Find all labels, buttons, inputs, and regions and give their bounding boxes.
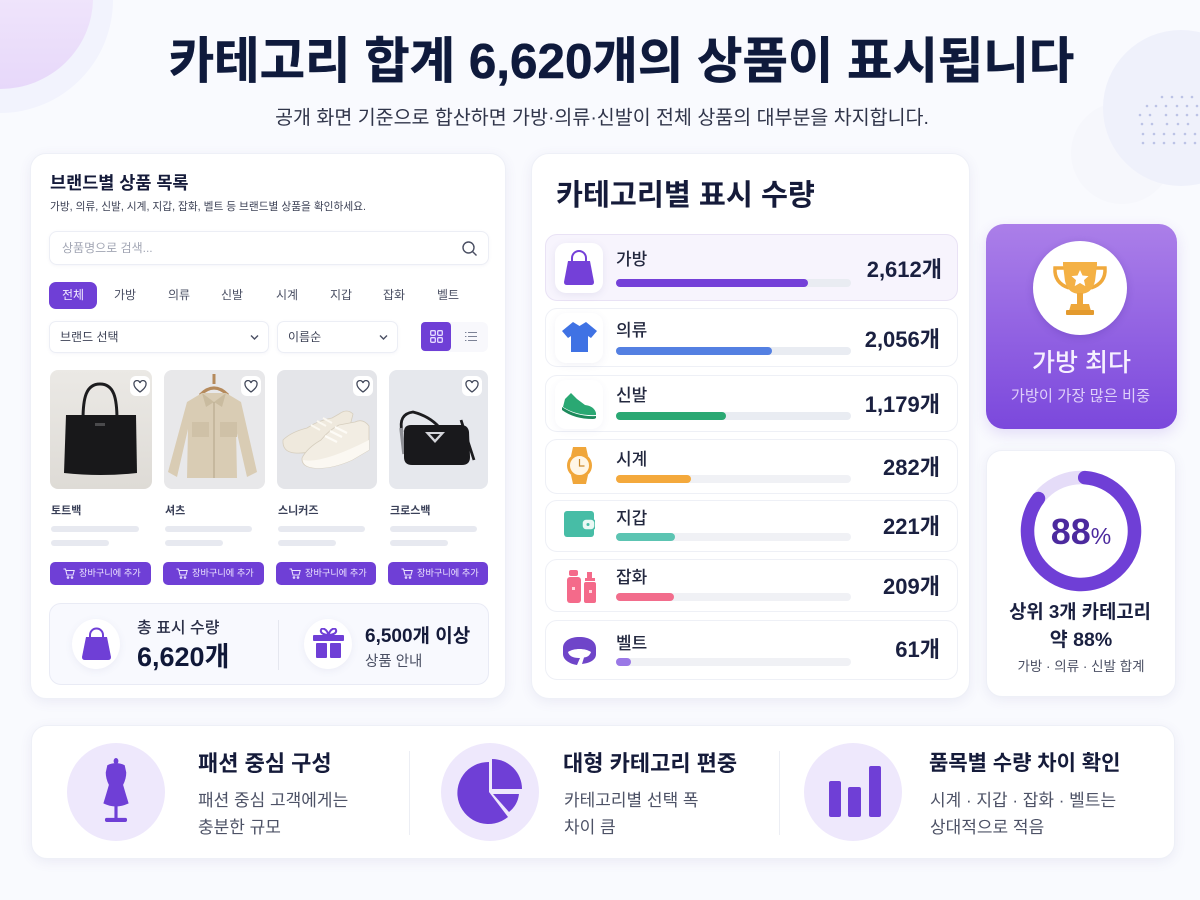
card heading: 상위 3개 카테고리 [1009, 601, 1151, 622]
background decoration: top left halo [0, 0, 113, 113]
add to cart button [388, 562, 488, 585]
value: 209개 [883, 574, 940, 599]
value: 1,179개 [865, 392, 940, 417]
card value: 약 88% [1050, 629, 1112, 651]
label: 지갑 [616, 509, 647, 528]
insight text: 충분한 규모 [198, 818, 281, 837]
product name: 셔츠 [165, 505, 185, 517]
icon: shopping bag [72, 619, 120, 669]
background decoration: top left blob [0, 0, 93, 89]
category tabs: 시계 [276, 288, 298, 302]
panel description: 가방, 의류, 신발, 시계, 지갑, 잡화, 벨트 등 브랜드별 상품을 확인하세요. [50, 201, 366, 213]
card: top three share [986, 450, 1176, 697]
label: 신발 [616, 386, 647, 405]
product card: crossbody bag [388, 370, 488, 585]
add to cart button [163, 562, 264, 585]
category tabs: 의류 [168, 288, 190, 302]
card: bags are largest [986, 224, 1177, 429]
bar [616, 475, 851, 483]
subtitle: 공개 화면 기준으로 합산하면 가방·의류·신발이 전체 상품의 대부분을 차지합니다. [275, 107, 929, 129]
insight heading: 품목별 수량 차이 확인 [929, 752, 1120, 775]
icon: t-shirt [555, 313, 603, 363]
insight text [198, 791, 348, 837]
divider [409, 751, 410, 835]
insight text: 차이 큼 [564, 818, 616, 837]
category tabs: 지갑 [330, 288, 352, 302]
bar [616, 279, 851, 287]
bar [616, 412, 851, 420]
add to cart button [276, 562, 376, 585]
category tabs: 벨트 [437, 288, 459, 302]
text placeholder [165, 540, 223, 546]
insight icon: mannequin [67, 743, 165, 841]
insight text: 카테고리별 선택 폭 [564, 791, 699, 810]
value: 2,612개 [867, 257, 942, 282]
insight text: 패션 중심 고객에게는 [198, 791, 348, 810]
total label: 총 표시 수량 [137, 620, 220, 637]
insight heading: 패션 중심 구성 [198, 751, 332, 776]
icon: watch [555, 443, 603, 491]
category tabs [114, 288, 459, 302]
search box [49, 231, 489, 265]
background decoration: top right circles and dots [1103, 30, 1200, 186]
wishlist heart [130, 376, 150, 396]
panel heading: 카테고리별 표시 수량 [556, 179, 815, 212]
label: 가방 [616, 250, 647, 269]
row: accessories [545, 559, 958, 612]
summary box [49, 603, 489, 685]
donut chart: 88%: 88% [1051, 511, 1111, 552]
text placeholder [51, 526, 139, 532]
add to cart button [50, 562, 151, 585]
card heading: 가방 최다 [1032, 349, 1131, 377]
add to cart button: 장바구니에 추가 [79, 568, 141, 578]
icon: shoe [555, 380, 603, 429]
category tabs: 신발 [221, 288, 243, 302]
row: clothing [545, 308, 958, 367]
insight icon: pie chart [441, 743, 539, 841]
divider [779, 751, 780, 835]
category tabs: 가방 [114, 288, 136, 302]
bar [616, 658, 851, 666]
text placeholder [51, 540, 109, 546]
bar [616, 347, 851, 355]
gift caption: 상품 안내 [365, 654, 422, 670]
divider [278, 620, 279, 670]
product image: crossbody bag [389, 370, 488, 489]
insight text: 시계 · 지갑 · 잡화 · 벨트는 [930, 791, 1116, 810]
icon: wallet [555, 503, 603, 549]
product image: sneakers [277, 370, 377, 489]
label: 잡화 [616, 568, 647, 587]
value: 282개 [883, 455, 940, 480]
label: 의류 [616, 321, 647, 340]
insight icon: bar chart [804, 743, 902, 841]
brand select: 브랜드 선택 [60, 330, 119, 344]
icon: trophy [1033, 241, 1127, 335]
search box: 상품명으로 검색... [62, 241, 153, 255]
icon: belt [555, 625, 603, 675]
icon: bag [555, 243, 603, 293]
label: 시계 [616, 450, 647, 469]
add to cart button: 장바구니에 추가 [192, 568, 254, 578]
bar [616, 533, 851, 541]
wishlist heart [241, 376, 261, 396]
row: belts [545, 620, 958, 680]
row: bags [545, 234, 958, 301]
wishlist heart [353, 376, 373, 396]
insight heading: 대형 카테고리 편중 [563, 751, 737, 776]
product image: shirt [164, 370, 265, 489]
panel heading: 브랜드별 상품 목록 [50, 173, 189, 193]
text placeholder [390, 540, 448, 546]
label: 벨트 [616, 634, 647, 653]
icon: gift [304, 619, 352, 669]
category tab: selected [49, 282, 97, 309]
category tab: selected: 전체 [62, 288, 84, 302]
card caption: 가방이 가장 많은 비중 [1011, 388, 1150, 405]
product card: sneakers [276, 370, 377, 585]
brand select [49, 321, 269, 353]
icon: bottles [555, 562, 603, 610]
insight text: 상대적으로 적음 [930, 818, 1044, 837]
text placeholder [278, 540, 336, 546]
donut chart: 88% [1020, 470, 1142, 592]
panel: key insights [31, 725, 1175, 859]
product card: tote bag [50, 370, 152, 585]
category tabs: 잡화 [383, 288, 405, 302]
product name: 토트백 [51, 505, 81, 517]
product name: 스니커즈 [278, 505, 318, 517]
sort select: 이름순 [288, 330, 321, 344]
panel: category counts [531, 153, 970, 699]
row: shoes [545, 375, 958, 432]
product card: shirt [163, 370, 265, 585]
text placeholder [165, 526, 252, 532]
gift headline: 6,500개 이상 [365, 626, 470, 647]
row: watches [545, 439, 958, 494]
insight text [930, 791, 1116, 837]
insight text [564, 791, 699, 837]
product name: 크로스백 [390, 505, 430, 517]
text placeholder [278, 526, 365, 532]
value: 61개 [895, 637, 940, 662]
view toggle [421, 322, 488, 352]
product image: tote bag [50, 370, 152, 489]
sort select [277, 321, 398, 353]
value: 221개 [883, 514, 940, 539]
wishlist heart [462, 376, 482, 396]
bar [616, 593, 851, 601]
value: 2,056개 [865, 327, 940, 352]
add to cart button: 장바구니에 추가 [305, 568, 367, 578]
panel: brand product list [30, 153, 506, 699]
text placeholder [390, 526, 477, 532]
total value: 6,620개 [137, 642, 229, 672]
add to cart button: 장바구니에 추가 [417, 568, 479, 578]
title: 카테고리 합계 6,620개의 상품이 표시됩니다 [169, 34, 1074, 89]
card caption: 가방 · 의류 · 신발 합계 [1017, 659, 1145, 674]
row: wallets [545, 500, 958, 552]
